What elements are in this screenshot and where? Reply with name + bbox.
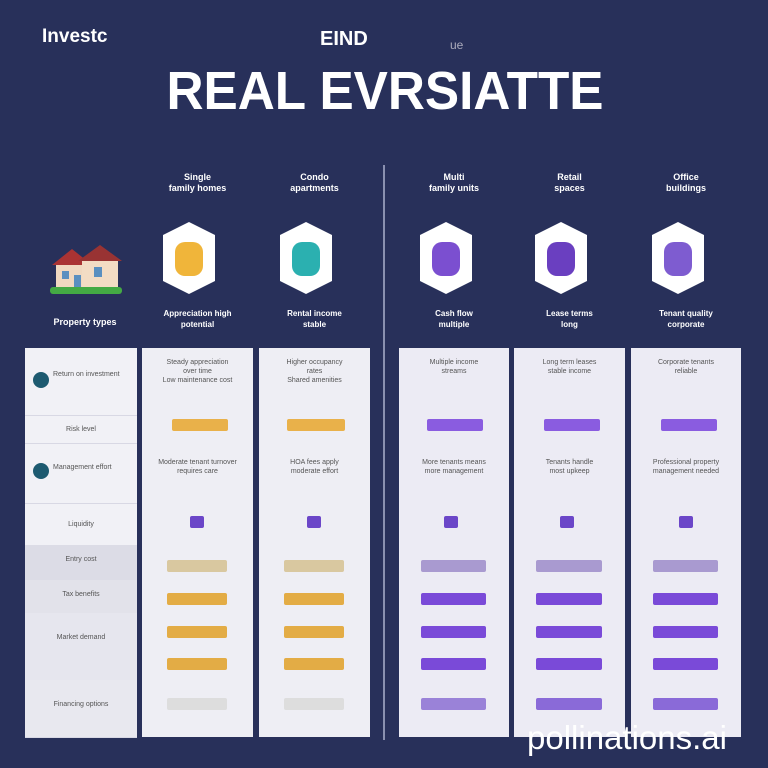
panel: column 2 — [259, 348, 370, 737]
header 2 — [290, 172, 339, 193]
panel: row labels: Market demand — [57, 634, 105, 641]
header 5: Office — [673, 172, 699, 182]
icon hex 2 — [280, 222, 332, 294]
small mark: ue — [450, 38, 463, 52]
panel: row labels: Financing options — [54, 701, 108, 708]
header 2: Condo — [300, 172, 329, 182]
panel: column 1: Low maintenance cost — [163, 377, 232, 384]
panel: column 1: over time — [183, 368, 212, 375]
column headers: long — [561, 320, 578, 329]
column headers: Tenant quality — [659, 309, 713, 318]
sub labels: potential — [181, 320, 214, 329]
header 1 — [168, 172, 226, 193]
panel: row labels: Return on investment — [53, 371, 120, 378]
header 5 — [666, 172, 706, 193]
panel: column 1: requires care — [177, 468, 218, 475]
panel: column 3: streams — [442, 368, 466, 375]
label: property type: Property types — [53, 317, 117, 327]
panel: column 4 — [514, 348, 625, 737]
small heading: invest: Investc — [42, 26, 107, 47]
header 4: Retail — [557, 172, 582, 182]
panel: row labels: Management effort — [53, 464, 112, 471]
icon hex 1 — [163, 222, 215, 294]
icon hex 4 — [535, 222, 587, 294]
panel: row labels: Entry cost — [65, 556, 97, 563]
panel: column 1 — [142, 348, 253, 737]
column headers: multiple — [439, 320, 469, 329]
panel: column 3: Multiple income — [430, 359, 478, 366]
header 3: family units — [429, 183, 479, 193]
column headers: Cash flow — [435, 309, 473, 318]
panel: column 3: more management — [425, 468, 483, 475]
column headers: stable — [303, 320, 326, 329]
panel: column 2: moderate effort — [291, 468, 338, 475]
divider — [383, 165, 385, 740]
title: REAL EVRSIATTE — [166, 61, 604, 121]
panel: column 4: Long term leases — [543, 359, 596, 366]
icon: house — [50, 245, 122, 294]
column headers: Lease terms — [546, 309, 593, 318]
panel: column 2: HOA fees apply — [290, 459, 339, 466]
panel: column 3: More tenants means — [422, 459, 486, 466]
panel: column 4: most upkeep — [549, 468, 590, 475]
panel: column 5: management needed — [653, 468, 719, 475]
panel: column 1: Moderate tenant turnover — [158, 459, 237, 466]
column headers — [163, 172, 713, 329]
panel: column 2: Shared amenities — [287, 377, 342, 384]
panel: column 5: Corporate tenants — [658, 359, 714, 366]
panel: row labels — [25, 348, 137, 737]
header 3 — [429, 172, 479, 193]
watermark: pollinations.ai — [527, 719, 727, 756]
header 4 — [554, 172, 585, 193]
small heading: find: EIND — [320, 28, 368, 50]
sub labels — [164, 309, 232, 329]
panel: column 2: Higher occupancy — [286, 359, 343, 366]
panel: column 2: rates — [307, 368, 322, 375]
header 1: family homes — [169, 183, 226, 193]
column headers: corporate — [668, 320, 704, 329]
panel: column 5: Professional property — [653, 459, 719, 466]
header 1: Single — [184, 172, 211, 182]
panel: row labels: Tax benefits — [62, 591, 100, 598]
icon hex 5 — [652, 222, 704, 294]
panel: column 4: Tenants handle — [546, 459, 593, 466]
panel: column 4: stable income — [548, 368, 591, 375]
column headers: Rental income — [287, 309, 342, 318]
panel: column 5 — [631, 348, 741, 737]
panel: row labels: Liquidity — [68, 521, 94, 528]
header 2: apartments — [290, 183, 339, 193]
sub labels: Appreciation high — [164, 309, 232, 318]
header 5: buildings — [666, 183, 706, 193]
icon hex 3 — [420, 222, 472, 294]
panel: column 5: reliable — [675, 368, 697, 375]
header 4: spaces — [554, 183, 585, 193]
panel: column 3 — [399, 348, 509, 737]
panel: column 1: Steady appreciation — [167, 359, 228, 366]
panel: row labels: Risk level — [66, 426, 96, 433]
header 3: Multi — [444, 172, 464, 182]
